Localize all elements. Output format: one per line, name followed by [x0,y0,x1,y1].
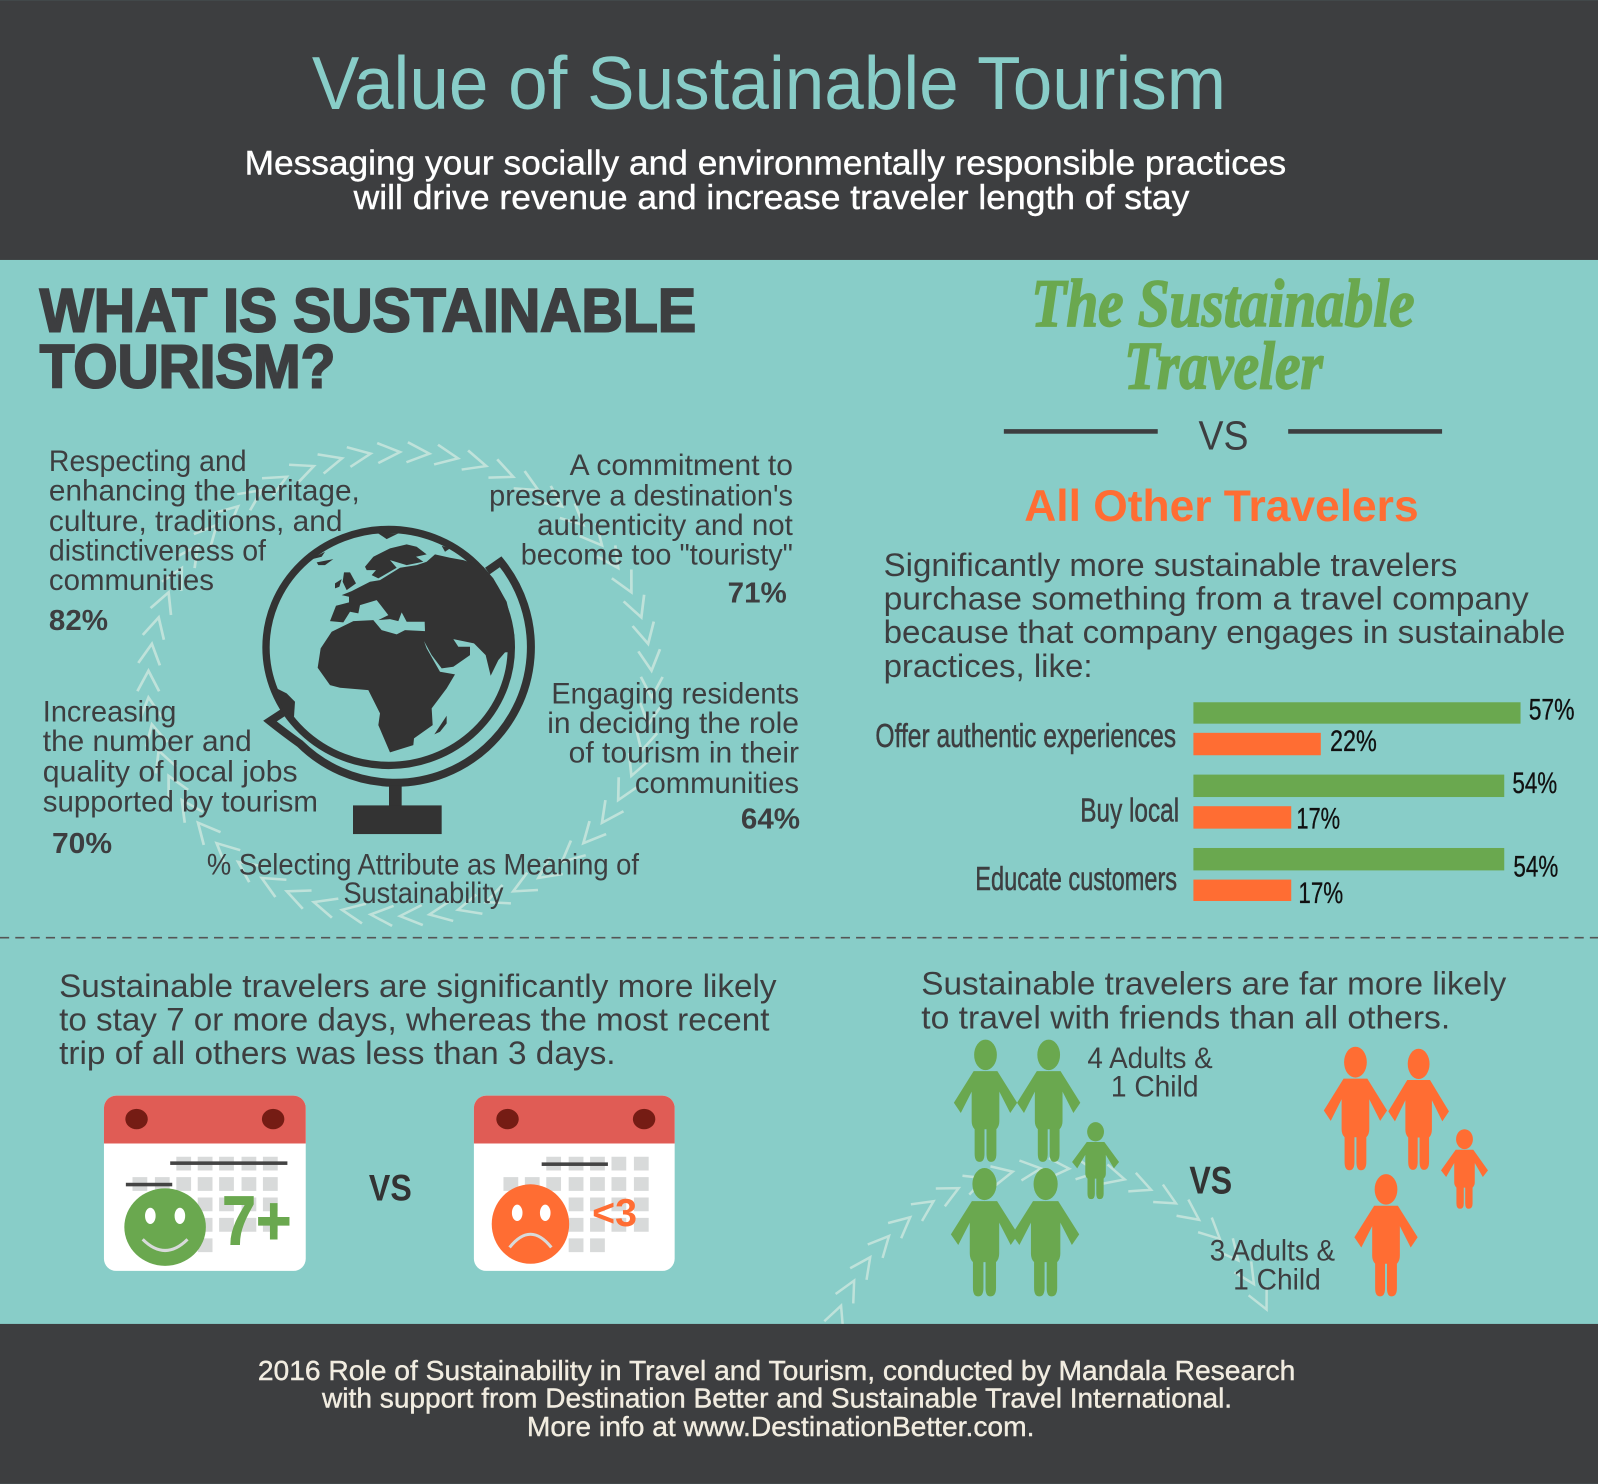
label: less than 3: <3 [592,1192,637,1235]
bar chart: 57% [1529,694,1575,727]
bar chart: 17% [1298,877,1343,910]
paragraph: purchase: Significantly more sustainable travelers [884,546,1457,583]
label: vs calendars: VS [369,1168,412,1209]
paragraph: purchase: because that company engages in sustainable [884,613,1565,650]
text block: travel with friends: Sustainable travelers are far more likely [921,965,1507,1002]
label: 4 adults and 1 child: 1 Child [1111,1071,1198,1104]
label: 3 adults and 1 child [1210,1235,1335,1296]
bar chart [875,694,1575,910]
text block: authenticity 71%: preserve a destination's [489,480,793,513]
text block: jobs 70%: 70% [52,828,112,860]
footer band [0,1324,1598,1484]
icon: calendar 7+ [104,1096,306,1271]
text block: residents 64%: in deciding the role [547,707,799,740]
text block: heritage 82%: communities [49,564,214,597]
label: 3 adults and 1 child: 3 Adults & [1210,1235,1335,1268]
text block: jobs 70%: quality of local jobs [43,756,298,789]
text block: travel with friends: to travel with friends than all others. [921,998,1450,1035]
heading: all other travelers: All Other Travelers [1024,480,1419,531]
caption: selecting attribute: Sustainability [343,877,504,910]
subtitle: will drive revenue and increase traveler length of stay [353,179,1190,217]
footer credits: More info at www.DestinationBetter.com. [527,1411,1034,1442]
paragraph: purchase: purchase something from a travel company [884,580,1529,617]
arrow arc behind people [824,1158,1275,1329]
header band [0,0,1598,260]
text block: residents 64%: 64% [741,804,800,836]
subtitle [245,144,1286,217]
text block: heritage 82%: 82% [49,605,108,637]
heading: the sustainable traveler [1031,266,1415,403]
bar chart: 54% [1512,767,1557,800]
paragraph: purchase [884,546,1565,684]
text block: heritage 82%: enhancing the heritage, [49,474,360,507]
text block: jobs 70% [43,696,318,860]
label: vs people: VS [1189,1159,1232,1202]
icon: globe [266,529,531,834]
icon: calendar under 3 [474,1096,675,1271]
icon: orange travel group [1324,1047,1488,1296]
text block: heritage 82% [49,445,360,637]
text block: heritage 82%: distinctiveness of [49,535,267,568]
heading: what is sustainable tourism: TOURISM? [40,332,335,400]
text block: residents 64%: communities [635,767,799,800]
heading: what is sustainable tourism: WHAT IS SUSTAINABLE [40,276,696,344]
text block: length of stay: Sustainable travelers are significantly more likely [59,967,777,1004]
footer credits: 2016 Role of Sustainability in Travel and Tourism, conducted by Mandala Research [258,1355,1295,1386]
footer credits [258,1355,1295,1442]
vs divider: VS [1198,413,1248,459]
icon: green travel group [951,1040,1119,1296]
title: Value of Sustainable Tourism [312,41,1226,125]
bar chart: Offer authentic experiences [875,718,1176,755]
text block: jobs 70%: supported by tourism [43,785,318,818]
text block: authenticity 71%: A commitment to [570,449,793,482]
text block: authenticity 71%: become too "touristy" [521,539,793,572]
text block: residents 64% [547,677,800,836]
caption: selecting attribute: % Selecting Attribute as Meaning of [207,848,640,881]
bar chart: Educate customers [975,861,1177,898]
bar chart: 54% [1513,851,1558,884]
label: 4 adults and 1 child: 4 Adults & [1087,1042,1213,1075]
text block: length of stay: trip of all others was less than 3 days. [59,1034,616,1071]
text block: jobs 70%: the number and [43,725,252,758]
label: 7+: 7+ [222,1181,291,1259]
heading: the sustainable traveler: Traveler [1124,328,1324,403]
icon: sad face [492,1184,569,1264]
text block: residents 64%: Engaging residents [551,677,799,710]
label: 4 adults and 1 child [1087,1042,1213,1104]
text block: heritage 82%: culture, traditions, and [49,505,342,538]
text block: jobs 70%: Increasing [43,696,176,729]
text block: length of stay: to stay 7 or more days, whereas the most recent [59,1000,769,1037]
subtitle: Messaging your socially and environmentally responsible practices [245,144,1286,182]
text block: heritage 82%: Respecting and [49,445,247,478]
paragraph: purchase: practices, like: [884,647,1093,684]
footer credits: with support from Destination Better and Sustainable Travel International. [321,1382,1232,1413]
vs divider [1004,413,1442,459]
icon: smiley face [124,1188,206,1266]
text block: travel with friends [921,965,1507,1035]
text block: authenticity 71%: authenticity and not [537,509,793,542]
bar chart: 22% [1330,725,1377,758]
caption: selecting attribute [207,848,640,910]
label: 3 adults and 1 child: 1 Child [1233,1263,1321,1296]
text block: authenticity 71%: 71% [728,577,787,609]
bar chart: Buy local [1080,792,1179,829]
text block: residents 64%: of tourism in their [569,736,799,769]
heading: the sustainable traveler: The Sustainable [1031,266,1415,341]
heading: what is sustainable tourism [40,276,696,400]
arrow ring around globe [137,442,663,926]
text block: length of stay [59,967,777,1071]
bar chart: 17% [1296,803,1340,836]
text block: authenticity 71% [489,449,793,609]
